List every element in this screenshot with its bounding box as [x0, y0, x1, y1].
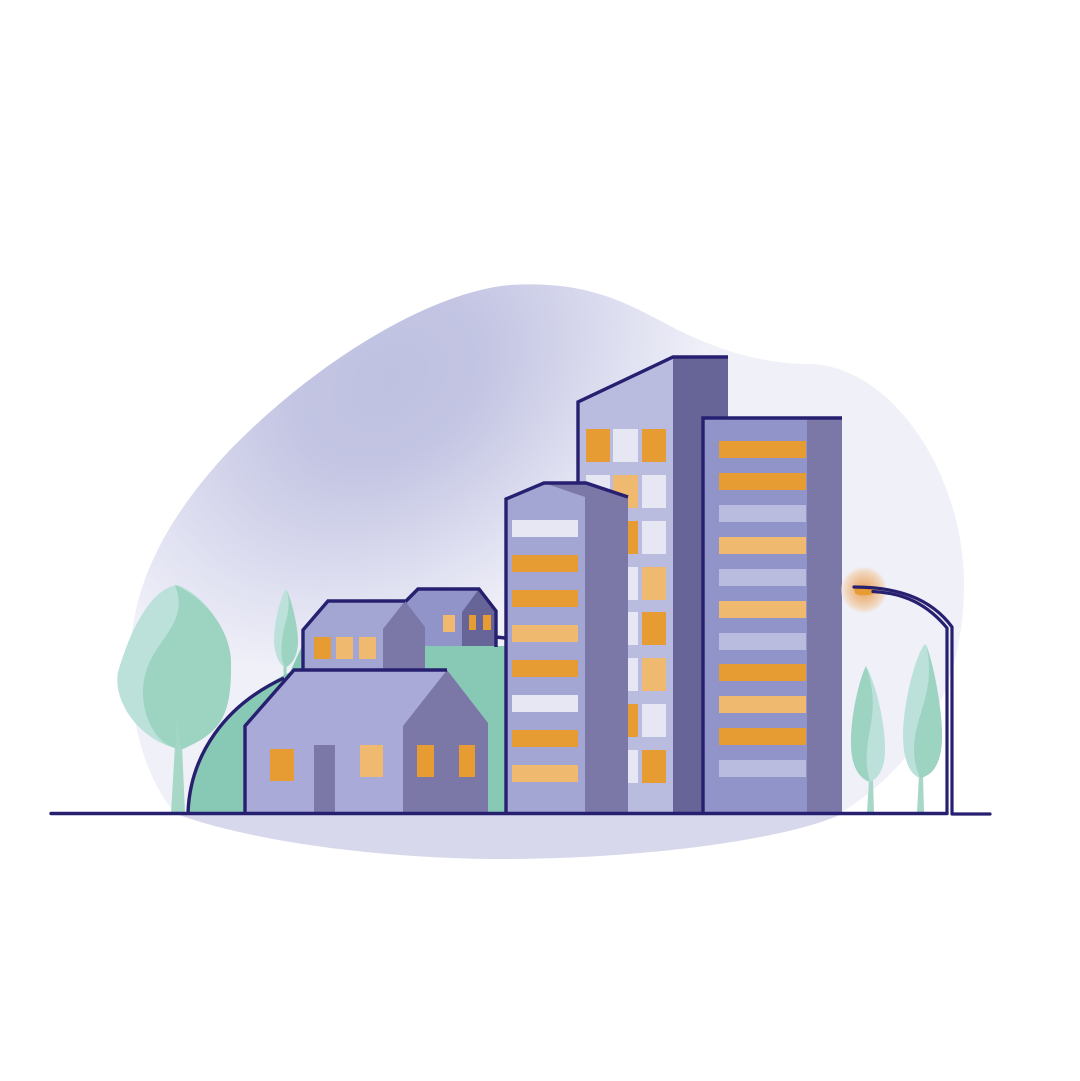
tower: tall back [578, 357, 728, 813]
house: back right small [405, 589, 505, 647]
tower: front right [703, 418, 842, 813]
background blob [130, 284, 964, 815]
street lamp [841, 567, 990, 814]
ground line [51, 812, 947, 815]
tower: front mid [506, 483, 628, 813]
ground shadow [176, 814, 842, 859]
hill [188, 646, 505, 813]
house: front large [245, 670, 488, 813]
house: back middle [303, 601, 425, 670]
tree: small back [274, 589, 298, 680]
tree: right tall [903, 644, 942, 813]
tree: large left [117, 585, 231, 813]
tree: right small [851, 666, 885, 813]
